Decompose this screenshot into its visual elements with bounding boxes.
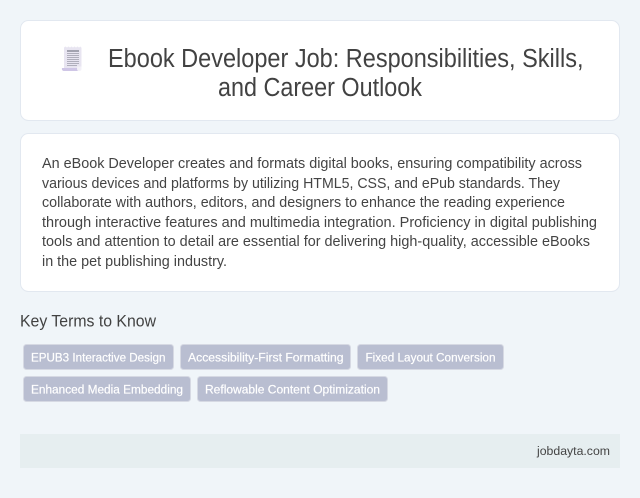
title: Ebook Developer Job: Responsibilities, Skills, xyxy=(108,45,584,73)
tag: Fixed Layout Conversion xyxy=(358,344,504,370)
tag: EPUB3 Interactive Design: EPUB3 Interactive Design xyxy=(31,350,166,364)
description text xyxy=(42,156,597,270)
description text: in the pet publishing industry. xyxy=(42,254,227,270)
panel: title card xyxy=(20,20,620,120)
title: and Career Outlook xyxy=(218,74,422,102)
description text: through interactive features and multimedia integration. Proficiency in digital publishing xyxy=(42,215,597,231)
description text: tools and attention to detail are essential for delivering high-quality, accessible eBooks xyxy=(42,234,590,250)
footer source text: jobdayta.com xyxy=(536,444,610,458)
footer bar xyxy=(20,434,620,468)
tag: Fixed Layout Conversion: Fixed Layout Conversion xyxy=(366,350,496,364)
heading: key terms: Key Terms to Know xyxy=(20,312,156,330)
description text: various devices and platforms by utilizing HTML5, CSS, and ePub standards. They xyxy=(42,176,561,192)
tag: Reflowable Content Optimization: Reflowable Content Optimization xyxy=(205,382,380,396)
tag list xyxy=(24,344,504,402)
tag: Reflowable Content Optimization xyxy=(198,376,388,402)
title xyxy=(108,45,584,102)
tag: EPUB3 Interactive Design xyxy=(24,344,174,370)
description text: collaborate with authors, editors, and designers to enhance the reading experience xyxy=(42,195,565,211)
panel: description card xyxy=(20,134,620,292)
tag: Enhanced Media Embedding xyxy=(24,376,190,402)
tag: Accessibility-First Formatting xyxy=(180,344,350,370)
tag: Enhanced Media Embedding: Enhanced Media Embedding xyxy=(31,382,183,396)
tag: Accessibility-First Formatting: Accessibility-First Formatting xyxy=(188,350,344,364)
description text: An eBook Developer creates and formats digital books, ensuring compatibility across xyxy=(42,156,582,172)
icon: ebook page scroll xyxy=(62,46,82,71)
